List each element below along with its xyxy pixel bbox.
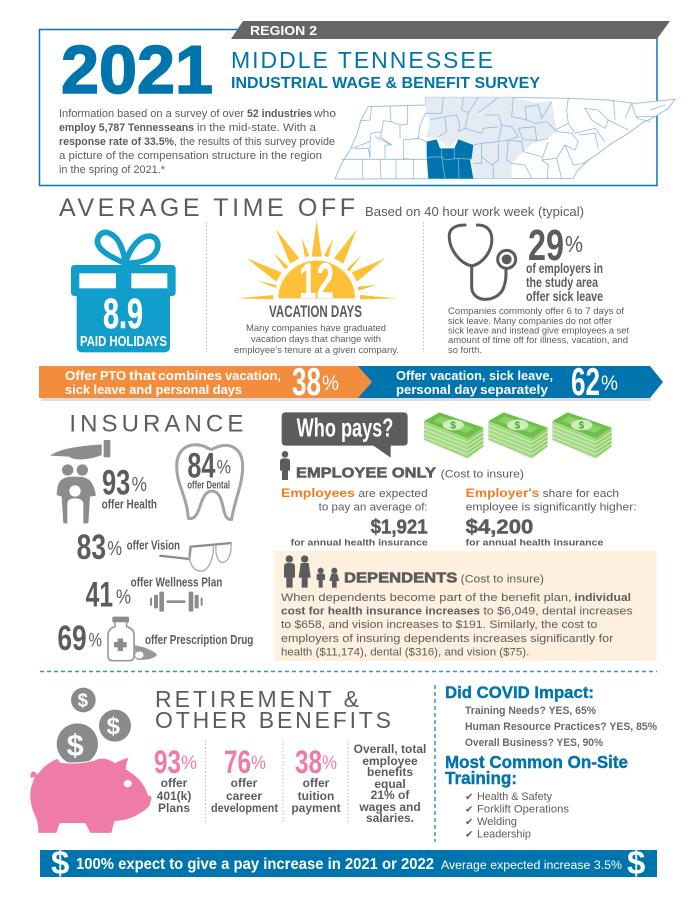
icon: piggy bank with coins: $ [78,690,89,711]
stat: wellness plan with dumbbell: 41 [86,576,113,615]
header panel [40,21,675,186]
orange arrow: combined PTO: vacation, [225,368,281,383]
sick leave block [448,221,629,356]
stat: 401(k): % [181,753,197,774]
orange arrow: combined PTO: combines [158,368,222,383]
callout: who pays: Who pays? [297,413,393,443]
stat: vision with glasses: % [107,538,122,560]
heading: retirement and other benefits [155,686,391,733]
employer cost: Employer's [466,486,540,500]
text: total benefits note: benefits [367,765,413,779]
employer cost: share for each [543,488,619,500]
icon: money stacks [424,412,612,458]
icon: money stacks: $ [515,420,521,431]
panel: on-site training: Health & Safety [477,791,552,803]
employee cost: $1,921 [371,515,428,538]
employee cost: for annual health insurance [291,538,428,548]
panel: dependents: individual [574,592,631,604]
stat: career development: career [226,789,262,803]
panel: COVID impact [445,684,657,749]
stat: prescription drug with bottle [57,617,253,661]
employer cost: for annual health insurance [466,538,603,548]
blue arrow: separate time off [340,361,663,404]
panel: on-site training: Welding [477,816,517,828]
stat: tuition payment: 38 [295,744,322,780]
panel: dependents [274,551,657,661]
stat: health: 93 [102,463,130,502]
icon: money stacks: $ [450,420,456,431]
heading: average time off [59,194,584,222]
text: total benefits note: 21% of [371,788,410,802]
stat: career development: development [211,801,278,815]
stat: career development: % [251,753,266,774]
sick leave block: sick leave. Many companies do not offer [448,316,612,327]
icon: sun with vacation days: vacation days that change with [251,334,381,345]
stat: 401(k): 401(k) [157,789,191,803]
employee cost: Employees [281,486,355,500]
text: total benefits note: salaries. [366,811,414,825]
heading: average time off: Based on 40 hour work week (typical) [365,204,584,219]
heading: retirement and other benefits: RETIREMENT & [155,686,359,712]
sick leave block: Companies commonly offer 6 to 7 days of [448,306,624,317]
orange arrow: combined PTO: sick leave and personal days [65,382,242,397]
icon: family of four [284,555,339,588]
icon: piggy bank with coins: $ [67,728,84,762]
employer cost [466,486,637,548]
text: total benefits note [354,742,426,825]
orange arrow: combined PTO: that [129,368,157,383]
panel: on-site training: ✔ [465,792,473,803]
stat: prescription drug with bottle: 69 [57,619,87,658]
panel: on-site training: ✔ [465,830,473,840]
stat: vision with glasses [77,528,232,571]
panel: dependents: When dependents become part of the benefit plan, [281,592,572,604]
stat: prescription drug with bottle: % [89,631,102,652]
panel: dependents: employers of insuring dependents increases significantly for [281,633,614,645]
panel: COVID impact: Training Needs? YES, 65% [465,705,596,717]
stat: tuition payment: tuition [298,789,334,803]
stat: 401(k) [154,744,197,815]
panel: dependents: to $658, and vision increases to $191. Similarly, the cost to [281,619,597,631]
survey title: MIDDLE TENNESSEE [231,47,493,73]
blue arrow: separate time off: Offer vacation, sick leave, [396,368,553,383]
intro text: in the spring of 2021.* [59,164,166,176]
sick leave block: sick leave and instead give employees a set [448,326,629,336]
icon: sun with vacation days [234,220,399,356]
bottom banner: 100% expect to give a pay increase in 2021 or 2022 [76,856,434,873]
stat: health [102,463,157,512]
employee only heading: EMPLOYEE ONLY [296,464,436,481]
sick leave block: amount of time off for illness, vacation, and [448,335,628,346]
heading: retirement and other benefits: OTHER BENEFITS [155,707,391,733]
icon: sun with vacation days: VACATION DAYS [269,302,362,321]
panel: insurance [50,411,253,661]
stat: 401(k): Plans [158,801,190,815]
blue arrow: separate time off: % [601,372,618,395]
orange arrow: combined PTO: PTO [100,368,126,383]
intro text: , the results of this survey provide [174,136,335,148]
stat: health: offer Health [102,497,157,512]
sick leave block: offer sick leave [526,289,603,304]
employee cost: to pay an average of: [319,501,428,513]
text: total benefits note: wages and [358,800,421,814]
employee only heading: (Cost to insure) [441,468,524,480]
bottom banner: Average expected increase 3.5% [441,860,622,872]
intro text: response rate of 33.5% [59,136,174,148]
orange arrow: combined PTO: Offer [65,368,97,383]
heading: average time off: AVERAGE TIME OFF [59,194,355,222]
stat: career development [211,744,278,815]
heading: insurance: INSURANCE [69,411,243,438]
icon: tooth with dental stat [177,445,243,519]
region banner [231,21,670,39]
intro text: Information based on a survey of over [59,108,244,120]
stat: tuition payment: payment [291,801,341,815]
text: total benefits note: equal [374,777,406,791]
panel: on-site training [445,752,628,840]
icon: tooth with dental stat: % [217,457,231,478]
year title: 2021 [61,32,213,108]
stat: wellness plan with dumbbell [86,576,222,615]
icon: sun with vacation days: 12 [299,253,334,309]
text: total benefits note: employee [362,754,418,768]
intro text: employ 5,787 Tennesseans [59,122,194,134]
panel: on-site training: ✔ [465,817,473,828]
stat: wellness plan with dumbbell: % [116,586,131,608]
stat: vision with glasses: offer Vision [127,537,180,552]
survey title: INDUSTRIAL WAGE & BENEFIT SURVEY [231,75,541,92]
panel: dependents: health ($11,174), dental ($316), and vision ($75). [281,647,529,659]
panel: dependents: to $6,049, dental increases [483,605,633,617]
panel: on-site training: Forklift Operations [477,804,570,816]
sick leave block: 29 [528,221,564,270]
employee cost: are expected [358,488,428,500]
stat: 401(k): offer [161,776,188,790]
orange arrow: combined PTO: % [322,372,339,395]
orange arrow: combined PTO [39,361,372,404]
panel: dependents: (Cost to insure) [461,574,544,586]
PTO arrow banner [39,361,663,404]
stat: prescription drug with bottle: offer Prescription Drug [145,632,253,647]
map: Tennessee counties [335,97,675,179]
panel: COVID impact: Overall Business? YES, 90% [465,737,603,749]
icon: gift with paid holidays: 8.9 [103,290,143,338]
blue arrow: separate time off: separately [480,382,549,397]
panel: on-site training: Most Common On-Site [445,752,628,772]
sick leave block: the study area [526,275,598,290]
bottom banner [40,844,657,881]
intro text: a picture of the compensation structure in the region [59,150,322,162]
callout: who pays [282,412,408,458]
stat: wellness plan with dumbbell: offer Wellness Plan [131,576,222,590]
region banner: REGION 2 [250,23,317,38]
intro text: who [313,108,336,120]
intro text: 52 industries [247,108,312,120]
stat: career development: offer [231,776,258,790]
bottom banner: $ [51,844,69,881]
icon: sun with vacation days: Many companies have graduated [246,323,386,334]
icon: stethoscope [449,225,516,299]
stat: health: % [132,473,147,496]
panel: dependents: DEPENDENTS [344,570,457,587]
icon: gift with paid holidays: PAID HOLIDAYS [80,333,167,350]
bottom banner: $ [627,844,645,881]
icon: tooth with dental stat: 84 [187,447,216,486]
blue arrow: separate time off: 62 [571,361,600,404]
icon: tooth with dental stat: offer Dental [187,479,230,491]
sick leave block: % [565,231,583,257]
stat: 401(k): 93 [154,744,181,780]
orange arrow: combined PTO: 38 [292,361,321,404]
icon: piggy bank with coins [30,688,152,833]
icon: sun with vacation days: employee's tenure at a given company. [234,345,399,356]
stat: career development: 76 [224,744,251,780]
text: total benefits note: Overall, total [354,742,426,756]
panel: dependents: cost for health insurance increases [281,605,480,617]
icon: piggy bank with coins: $ [107,713,120,740]
panel: on-site training: Leadership [477,828,531,840]
panel: on-site training: ✔ [465,804,473,816]
sick leave block: so forth. [448,345,482,356]
sick leave block: of employers in [526,261,603,276]
blue arrow: separate time off: personal day [396,382,478,397]
icon: hand and family [50,440,110,524]
panel: who pays [274,412,657,661]
employer cost: $4,200 [466,515,533,538]
icon: gift with paid holidays [71,232,176,352]
stat: tuition payment [291,744,341,815]
intro text: in the mid-state. With a [197,122,317,134]
survey title [231,47,541,92]
panel: on-site training: Training: [445,768,517,788]
icon: money stacks: $ [579,420,585,431]
panel: COVID impact: Human Resource Practices? YES, 85% [465,721,657,733]
employee only heading [280,451,524,481]
stat: tuition payment: offer [303,776,330,790]
stat: tuition payment: % [322,753,337,774]
panel: COVID impact: Did COVID Impact: [445,684,594,702]
intro text [59,108,336,176]
employee cost [281,486,428,548]
employer cost: employee is significantly higher: [466,501,637,513]
stat: vision with glasses: 83 [77,528,106,567]
